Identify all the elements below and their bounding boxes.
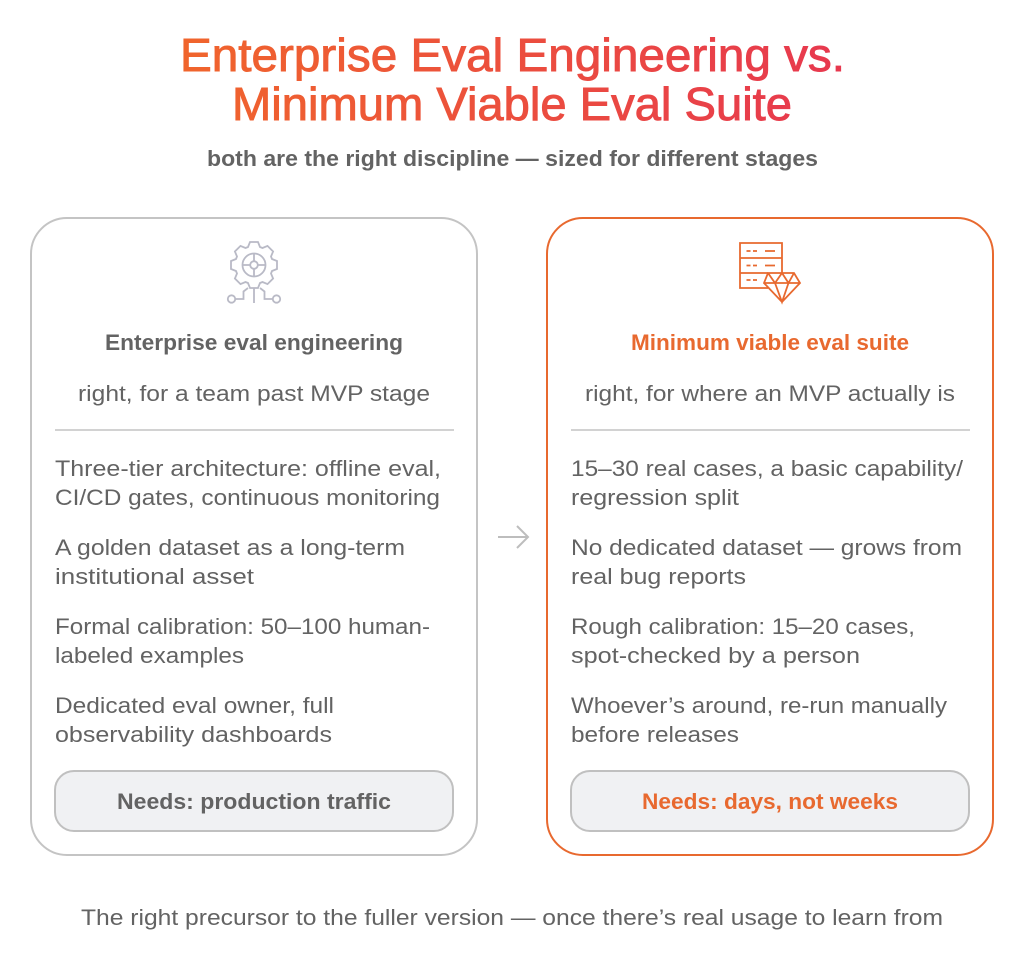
list item: dataset: institutional asset — [55, 564, 255, 589]
list item: whoever — [571, 693, 948, 747]
card heading: Enterprise eval engineering — [105, 330, 403, 355]
list item: calibration: Formal calibration: 50–100 human- — [55, 614, 430, 639]
list item: architecture — [55, 456, 441, 510]
pill: needs production traffic: Needs: production traffic — [117, 789, 391, 814]
list item: no dataset — [571, 535, 962, 589]
title: Minimum Viable Eval Suite — [232, 78, 792, 130]
title — [180, 29, 845, 130]
arrow — [498, 526, 528, 548]
card subheading: right, for a team past MVP stage — [78, 381, 430, 406]
subtitle: both are the right discipline — sized for different stages — [207, 146, 818, 171]
list item: whoever: before releases — [571, 722, 739, 747]
list item: owner: observability dashboards — [55, 722, 332, 747]
card subheading: right, for where an MVP actually is — [585, 381, 955, 406]
icon: gear with circuit — [228, 242, 280, 303]
pill: needs production traffic — [55, 771, 453, 831]
title: Enterprise Eval Engineering vs. — [180, 29, 845, 81]
list item: no dataset: real bug reports — [571, 564, 746, 589]
list item: cases: regression split — [571, 485, 740, 510]
list item: architecture: Three-tier architecture: offline eval, — [55, 456, 441, 481]
pill: needs days not weeks — [571, 771, 969, 831]
list item: cases — [571, 456, 964, 510]
list item: calibration — [55, 614, 430, 668]
list item: architecture: CI/CD gates, continuous monitoring — [55, 485, 440, 510]
list item: calibration: labeled examples — [55, 643, 244, 668]
card heading: Minimum viable eval suite — [631, 330, 909, 355]
list item: whoever: Whoever’s around, re-run manually — [571, 693, 948, 718]
list item: rough calibration: spot-checked by a person — [571, 643, 860, 668]
list item: owner: Dedicated eval owner, full — [55, 693, 334, 718]
list item: rough calibration: Rough calibration: 15–20 cases, — [571, 614, 915, 639]
panel: minimum viable eval suite — [547, 218, 993, 855]
list item: dataset: A golden dataset as a long-term — [55, 535, 405, 560]
pill: needs days not weeks: Needs: days, not weeks — [642, 789, 898, 814]
footer note: The right precursor to the fuller version — once there’s real usage to learn from — [81, 905, 943, 930]
list item: cases: 15–30 real cases, a basic capability/ — [571, 456, 964, 481]
list item: owner — [55, 693, 334, 747]
list item: no dataset: No dedicated dataset — grows from — [571, 535, 962, 560]
list item: dataset — [55, 535, 405, 589]
list item: rough calibration — [571, 614, 915, 668]
icon: server with diamond — [740, 243, 800, 302]
panel: enterprise eval engineering — [31, 218, 477, 855]
